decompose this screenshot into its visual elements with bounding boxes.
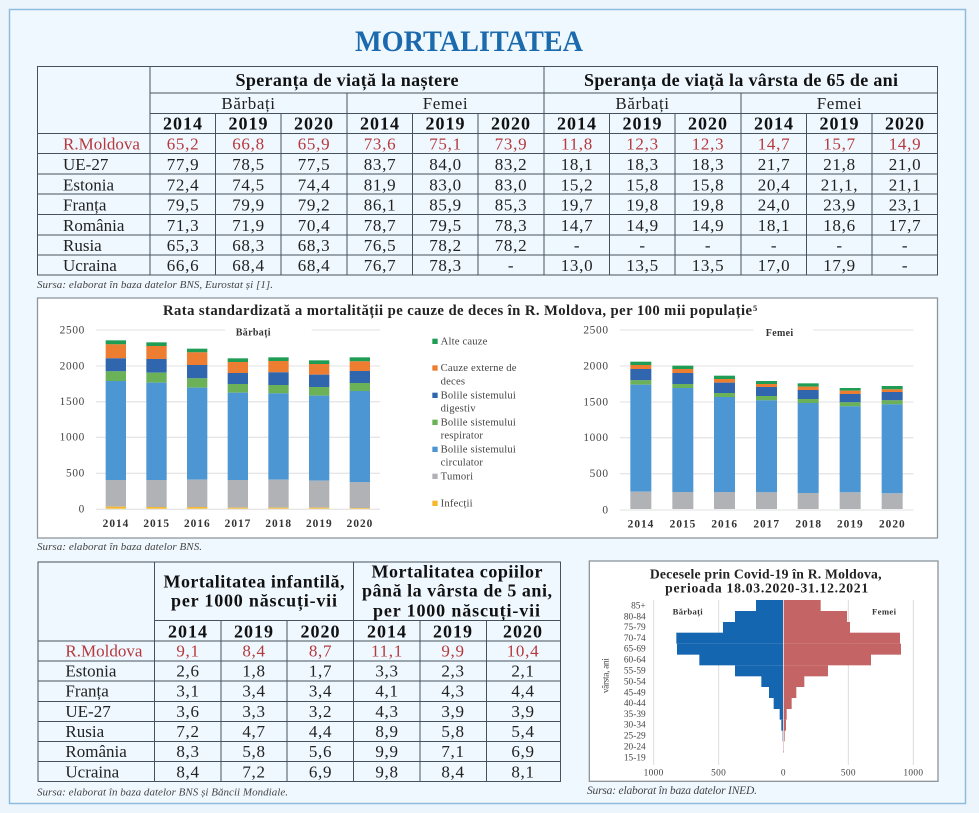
row: UE-27: 84,0: [429, 155, 462, 174]
row: Ucraina: Ucraina: [63, 256, 117, 275]
row: Rusia: 76,5: [364, 236, 396, 255]
row: R.Moldova: 9,1: [176, 642, 200, 661]
row: Franța: 19,8: [626, 196, 659, 214]
row: R.Moldova: R.Moldova: [63, 134, 140, 154]
years row: 2014: [163, 114, 203, 134]
row: Rusia: 68,3: [298, 236, 330, 255]
label: women: Femei: [872, 606, 897, 616]
row: R.Moldova: 66,8: [232, 134, 265, 154]
age labels: 75-79: [624, 623, 646, 633]
source note: charts: Sursa: elaborat în baza datelor BNS.: [37, 541, 202, 553]
row: Franța: 19,8: [692, 196, 724, 214]
row: Franța: 3,1: [176, 682, 200, 701]
row: R.Moldova: [63, 134, 921, 154]
row: Estonia: 1,8: [242, 662, 266, 681]
row: Rusia: 8,9: [375, 722, 399, 741]
row: Estonia: 15,2: [561, 176, 593, 194]
row: Rusia: 65,3: [167, 236, 199, 255]
y axis labels: 2500: [583, 324, 609, 336]
bar 2020: [350, 357, 370, 509]
row: Estonia: 20,4: [758, 176, 790, 194]
row: România: 14,9: [626, 216, 659, 235]
row: România: 6,9: [511, 742, 535, 761]
row: Franța: 79,2: [298, 196, 330, 214]
legend: Bolile sistemului: [441, 417, 516, 428]
row: Estonia: 72,4: [167, 176, 199, 194]
y axis labels: 0: [602, 504, 609, 516]
y axis labels: 500: [66, 468, 85, 480]
panel: covid deaths pyramid: [589, 561, 938, 781]
header: infant mortality: per 1000 născuți-vii: [171, 591, 337, 612]
age labels: 45-49: [624, 688, 646, 698]
row: Estonia: 83,0: [429, 176, 462, 194]
panel: mortality by cause charts: [38, 298, 938, 538]
age labels: 35-39: [624, 710, 646, 720]
row: Franța: [65, 682, 535, 701]
chart title: Rata standardizată a mortalității pe cauze de deces în R. Moldova, per 100 mii populație: [163, 303, 752, 319]
years row: 2020: [688, 114, 728, 134]
header: under-5 mortality: Mortalitatea copiilor: [372, 562, 542, 582]
age labels: 85+: [631, 602, 646, 612]
row: Rusia: -: [836, 236, 843, 255]
row: Ucraina: 68,4: [232, 256, 265, 275]
x axis labels: 500: [711, 768, 726, 778]
row: Franța: 23,1: [889, 196, 921, 214]
footnote mark: 5: [753, 303, 757, 313]
years row: 2019: [426, 114, 466, 134]
row: Estonia: 1,7: [309, 662, 332, 681]
bar 2018: [798, 383, 819, 509]
header: under-5 mortality: [362, 562, 552, 622]
age labels: 60-64: [624, 656, 646, 666]
y axis labels: 1000: [60, 432, 85, 444]
row: Estonia: 74,4: [298, 176, 330, 194]
chart: men: [60, 324, 380, 530]
bar 2019: [309, 360, 329, 509]
row: R.Moldova: 8,7: [309, 642, 332, 661]
row: Estonia: 3,3: [375, 662, 399, 681]
x axis labels: 500: [841, 768, 856, 778]
row: România: 18,6: [823, 216, 856, 235]
row: UE-27: 21,8: [823, 155, 856, 174]
bar 2017: [756, 381, 777, 509]
legend: digestiv: [441, 404, 476, 415]
row: Estonia: [65, 662, 535, 681]
row: Ucraina: 8,4: [176, 762, 200, 781]
age labels: 20-24: [624, 743, 646, 753]
chart title: perioada 18.03.2020-31.12.2021: [665, 581, 868, 596]
chart title: [650, 566, 881, 596]
row: R.Moldova: 14,9: [889, 134, 921, 154]
y axis labels: 1000: [583, 432, 609, 444]
age labels: 70-74: [624, 634, 646, 644]
row: UE-27: 18,3: [692, 155, 724, 174]
years row: 2014: [754, 114, 794, 134]
row: România: 78,3: [495, 216, 527, 235]
row: România: România: [65, 742, 127, 761]
years row: [163, 114, 925, 134]
row: R.Moldova: 15,7: [823, 134, 856, 154]
x axis labels: [644, 768, 923, 778]
row: România: 79,5: [429, 216, 462, 235]
legend: deces: [441, 376, 465, 387]
bars: men: [676, 600, 783, 752]
label: men: Bărbați: [673, 606, 703, 616]
row: UE-27: [63, 155, 921, 174]
header: life expectancy at birth: Speranța de viață la naștere: [236, 70, 458, 91]
y axis labels: 2000: [583, 360, 609, 372]
years row: 2014: [557, 114, 597, 134]
title: MORTALITATEA: [355, 25, 583, 58]
row: R.Moldova: 9,9: [441, 642, 465, 661]
years row: 2014: [367, 621, 407, 641]
row: Ucraina: 78,3: [429, 256, 462, 275]
sub-headers: sex: Bărbați: [221, 94, 276, 113]
row: Estonia: 83,0: [495, 176, 527, 194]
years row: 2014: [360, 114, 400, 134]
row: R.Moldova: 65,9: [298, 134, 330, 154]
bar 2014: [106, 340, 126, 509]
bar 2018: [268, 357, 289, 509]
row: UE-27: 21,7: [758, 155, 790, 174]
age labels: 65-69: [624, 645, 646, 655]
years row: 2014: [168, 621, 208, 641]
row: Ucraina: 8,4: [441, 762, 465, 781]
row: Rusia: 5,4: [511, 722, 535, 741]
x axis labels: 2017: [225, 518, 251, 530]
row: România: 78,7: [364, 216, 396, 235]
row: România: 70,4: [298, 216, 330, 235]
years row: 2020: [491, 114, 531, 134]
row: România: 5,8: [242, 742, 266, 761]
sub-headers: sex: Femei: [423, 94, 468, 113]
row: România: 17,7: [889, 216, 921, 235]
row: Ucraina: 13,0: [561, 256, 593, 275]
y axis labels: 500: [590, 468, 609, 480]
row: România: [63, 216, 921, 235]
row: Franța: 86,1: [364, 196, 396, 214]
row: Estonia: [63, 176, 921, 194]
y axis labels: [583, 324, 609, 516]
x axis labels: 2020: [879, 519, 906, 531]
age labels: 40-44: [624, 699, 646, 709]
row: România: 8,3: [176, 742, 200, 761]
row: România: 14,7: [561, 216, 593, 235]
age labels: 25-29: [624, 732, 646, 742]
row: Franța: Franța: [65, 682, 109, 701]
y axis labels: 2000: [60, 360, 85, 372]
row: Ucraina: 8,1: [511, 762, 535, 781]
years row: [168, 621, 543, 641]
row: Rusia: 4,7: [242, 722, 266, 741]
legend: Cauze externe de: [441, 363, 517, 374]
age labels: 55-59: [624, 667, 646, 677]
row: Rusia: [63, 236, 908, 255]
header: infant mortality: Mortalitatea infantilă,: [164, 571, 344, 591]
x axis labels: 1000: [644, 768, 664, 778]
row: R.Moldova: 75,1: [429, 134, 462, 154]
row: UE-27: 83,2: [495, 155, 527, 174]
row: R.Moldova: R.Moldova: [65, 642, 143, 661]
source note: table 2: Sursa: elaborat în baza datelor BNS și Băncii Mondiale.: [37, 787, 288, 799]
row: România: 9,9: [375, 742, 399, 761]
row: Franța: 85,9: [429, 196, 462, 214]
row: Franța: [63, 196, 921, 214]
legend: circulator: [441, 457, 483, 468]
years row: 2020: [503, 621, 543, 641]
header: under-5 mortality: per 1000 născuți-vii: [373, 601, 540, 622]
bar 2015: [146, 342, 167, 509]
row: Rusia: 7,2: [176, 722, 200, 741]
row: Estonia: 21,1,: [821, 176, 858, 194]
row: Ucraina: -: [902, 256, 908, 275]
row: Franța: 3,4: [242, 682, 266, 701]
years row: 2019: [433, 621, 473, 641]
row: UE-27: 78,5: [232, 155, 265, 174]
age labels: [624, 602, 646, 764]
row: R.Moldova: 12,3: [626, 134, 659, 154]
table: life expectancy: [38, 66, 938, 275]
row: România: [65, 742, 535, 761]
row: Rusia: [65, 722, 535, 741]
row: UE-27: [65, 702, 535, 721]
row: R.Moldova: 65,2: [167, 134, 199, 154]
row: Estonia: 81,9: [364, 176, 396, 194]
years row: 2019: [622, 114, 662, 134]
row: Ucraina: 76,7: [364, 256, 396, 275]
row: Ucraina: [65, 762, 535, 781]
legend: Tumori: [441, 471, 473, 482]
row: România: 71,9: [232, 216, 265, 235]
table: infant mortality: [38, 562, 560, 782]
row: Rusia: Rusia: [63, 236, 102, 255]
sub-headers: sex: Bărbați: [615, 94, 670, 113]
row: UE-27: 18,3: [626, 155, 659, 174]
row: Estonia: 2,1: [511, 662, 535, 681]
row: R.Moldova: 11,8: [561, 134, 593, 154]
x axis labels: 2019: [306, 518, 333, 530]
source note: covid chart: Sursa: elaborat în baza datelor INED.: [587, 785, 757, 797]
y axis labels: 2500: [60, 324, 85, 336]
y axis labels: 0: [79, 504, 85, 516]
legend: Infecții: [441, 498, 473, 509]
row: UE-27: 3,3: [242, 702, 266, 721]
x axis labels: 2017: [753, 519, 780, 531]
row: Estonia: 2,6: [176, 662, 200, 681]
chart title: Decesele prin Covid-19 în R. Moldova,: [650, 566, 881, 581]
row: Rusia: Rusia: [65, 722, 105, 741]
row: Rusia: -: [639, 236, 646, 255]
x axis labels: [628, 519, 906, 531]
bar 2019: [840, 388, 861, 509]
axis title: age: vârsta, ani: [601, 658, 611, 693]
bar 2014: [630, 362, 651, 509]
x axis labels: 2016: [711, 519, 738, 531]
age labels: 80-84: [624, 612, 646, 622]
row: Franța: 79,9: [232, 196, 265, 214]
sub-headers: sex: Femei: [817, 94, 862, 113]
x axis labels: 2018: [265, 518, 292, 530]
x axis labels: 2015: [143, 518, 170, 530]
row: România: 5,6: [309, 742, 332, 761]
row: Franța: 85,3: [495, 196, 527, 214]
x axis labels: 2019: [837, 519, 864, 531]
row: Rusia: -: [705, 236, 711, 255]
years row: 2019: [234, 621, 274, 641]
bar 2016: [187, 349, 207, 509]
years row: 2019: [228, 114, 268, 134]
chart: women: [583, 324, 913, 531]
row: Franța: 4,1: [375, 682, 399, 701]
row: Franța: 4,4: [511, 682, 535, 701]
row: R.Moldova: 73,6: [364, 134, 396, 154]
bar 2015: [672, 366, 693, 509]
years row: 2020: [294, 114, 334, 134]
row: UE-27: 21,0: [889, 155, 921, 174]
bar 2020: [882, 386, 903, 509]
header: under-5 mortality: până la vârsta de 5 ani,: [362, 581, 552, 601]
row: Rusia: -: [771, 236, 777, 255]
row: UE-27: 18,1: [561, 155, 593, 174]
row: România: 18,1: [758, 216, 790, 235]
row: Franța: Franța: [63, 196, 107, 214]
row: Ucraina: 6,9: [309, 762, 332, 781]
x axis labels: 2016: [184, 518, 211, 530]
row: Estonia: 15,8: [692, 176, 724, 194]
age labels: 30-34: [624, 721, 646, 731]
row: România: 14,9: [692, 216, 724, 235]
row: Estonia: 21,1: [889, 176, 921, 194]
row: Franța: 4,3: [441, 682, 465, 701]
y axis labels: 1500: [60, 396, 85, 408]
row: Franța: 79,5: [167, 196, 199, 214]
row: UE-27: 3,9: [441, 702, 465, 721]
x axis labels: 0: [781, 768, 786, 778]
row: Rusia: 78,2: [429, 236, 462, 255]
years row: 2020: [885, 114, 925, 134]
row: Rusia: 4,4: [309, 722, 332, 741]
legend: Alte cauze: [441, 336, 488, 347]
row: UE-27: 77,9: [167, 155, 199, 174]
row: Ucraina: 17,9: [823, 256, 856, 275]
legend: respirator: [441, 431, 483, 442]
legend: Bolile sistemului: [441, 445, 516, 456]
row: UE-27: 83,7: [364, 155, 396, 174]
row: R.Moldova: 73,9: [495, 134, 527, 154]
header: life expectancy at 65: Speranța de viață la vârsta de 65 de ani: [584, 70, 898, 91]
source note: table 1: Sursa: elaborat în baza datelor BNS, Eurostat și [1].: [37, 279, 273, 291]
row: Ucraina: -: [508, 256, 514, 275]
row: Ucraina: Ucraina: [65, 762, 120, 781]
bars: women: [783, 600, 901, 752]
x axis labels: 2014: [628, 519, 654, 531]
row: Franța: 3,4: [309, 682, 332, 701]
row: UE-27: 77,5: [298, 155, 330, 174]
row: Estonia: Estonia: [65, 662, 117, 681]
row: România: 7,1: [441, 742, 465, 761]
sub-headers: sex: [221, 94, 862, 113]
x axis labels: 2014: [103, 518, 129, 530]
x axis labels: [103, 518, 373, 530]
row: Ucraina: 13,5: [626, 256, 659, 275]
row: Franța: 23,9: [823, 196, 856, 214]
row: UE-27: 3,2: [309, 702, 332, 721]
row: Franța: 19,7: [561, 196, 593, 214]
legend: Bolile sistemului: [441, 390, 516, 401]
row: Rusia: -: [902, 236, 908, 255]
row: Ucraina: 17,0: [758, 256, 790, 275]
row: Ucraina: 9,8: [375, 762, 399, 781]
x axis labels: 1000: [903, 768, 923, 778]
row: Rusia: 68,3: [232, 236, 265, 255]
row: Rusia: 78,2: [495, 236, 527, 255]
row: Estonia: 15,8: [626, 176, 659, 194]
row: Ucraina: 7,2: [242, 762, 266, 781]
legend: [432, 336, 517, 509]
row: Ucraina: 13,5: [692, 256, 724, 275]
row: Rusia: 5,8: [441, 722, 465, 741]
y axis labels: [60, 324, 85, 516]
row: România: 71,3: [167, 216, 199, 235]
years row: 2019: [820, 114, 860, 134]
x axis labels: 2015: [670, 519, 696, 531]
row: Ucraina: 66,6: [167, 256, 199, 275]
row: UE-27: 4,3: [375, 702, 399, 721]
row: R.Moldova: 14,7: [758, 134, 790, 154]
row: UE-27: 3,6: [176, 702, 200, 721]
row: R.Moldova: 11,1: [371, 642, 403, 661]
row: Estonia: 2,3: [441, 662, 465, 681]
row: Franța: 24,0: [758, 196, 790, 214]
bar 2016: [714, 376, 735, 509]
row: Ucraina: 68,4: [298, 256, 330, 275]
years row: 2020: [300, 621, 340, 641]
row: R.Moldova: 10,4: [507, 642, 539, 661]
age labels: 50-54: [624, 677, 646, 687]
row: R.Moldova: [65, 642, 539, 661]
chart subtitle: Bărbați: Bărbați: [236, 328, 271, 339]
row: UE-27: UE-27: [63, 155, 109, 174]
age labels: 15-19: [624, 754, 646, 764]
row: Rusia: -: [574, 236, 580, 255]
row: România: România: [63, 216, 125, 235]
row: Estonia: 74,5: [232, 176, 265, 194]
row: UE-27: UE-27: [65, 702, 111, 721]
header: infant mortality: [164, 571, 344, 612]
row: Estonia: Estonia: [63, 176, 114, 194]
bar 2017: [228, 358, 248, 509]
row: R.Moldova: 8,4: [242, 642, 266, 661]
row: UE-27: 3,9: [511, 702, 535, 721]
x axis labels: 2020: [347, 518, 373, 530]
y axis labels: 1500: [583, 396, 609, 408]
chart subtitle: Femei: Femei: [766, 328, 794, 339]
row: Ucraina: [63, 256, 908, 275]
x axis labels: 2018: [795, 519, 822, 531]
row: R.Moldova: 12,3: [692, 134, 724, 154]
